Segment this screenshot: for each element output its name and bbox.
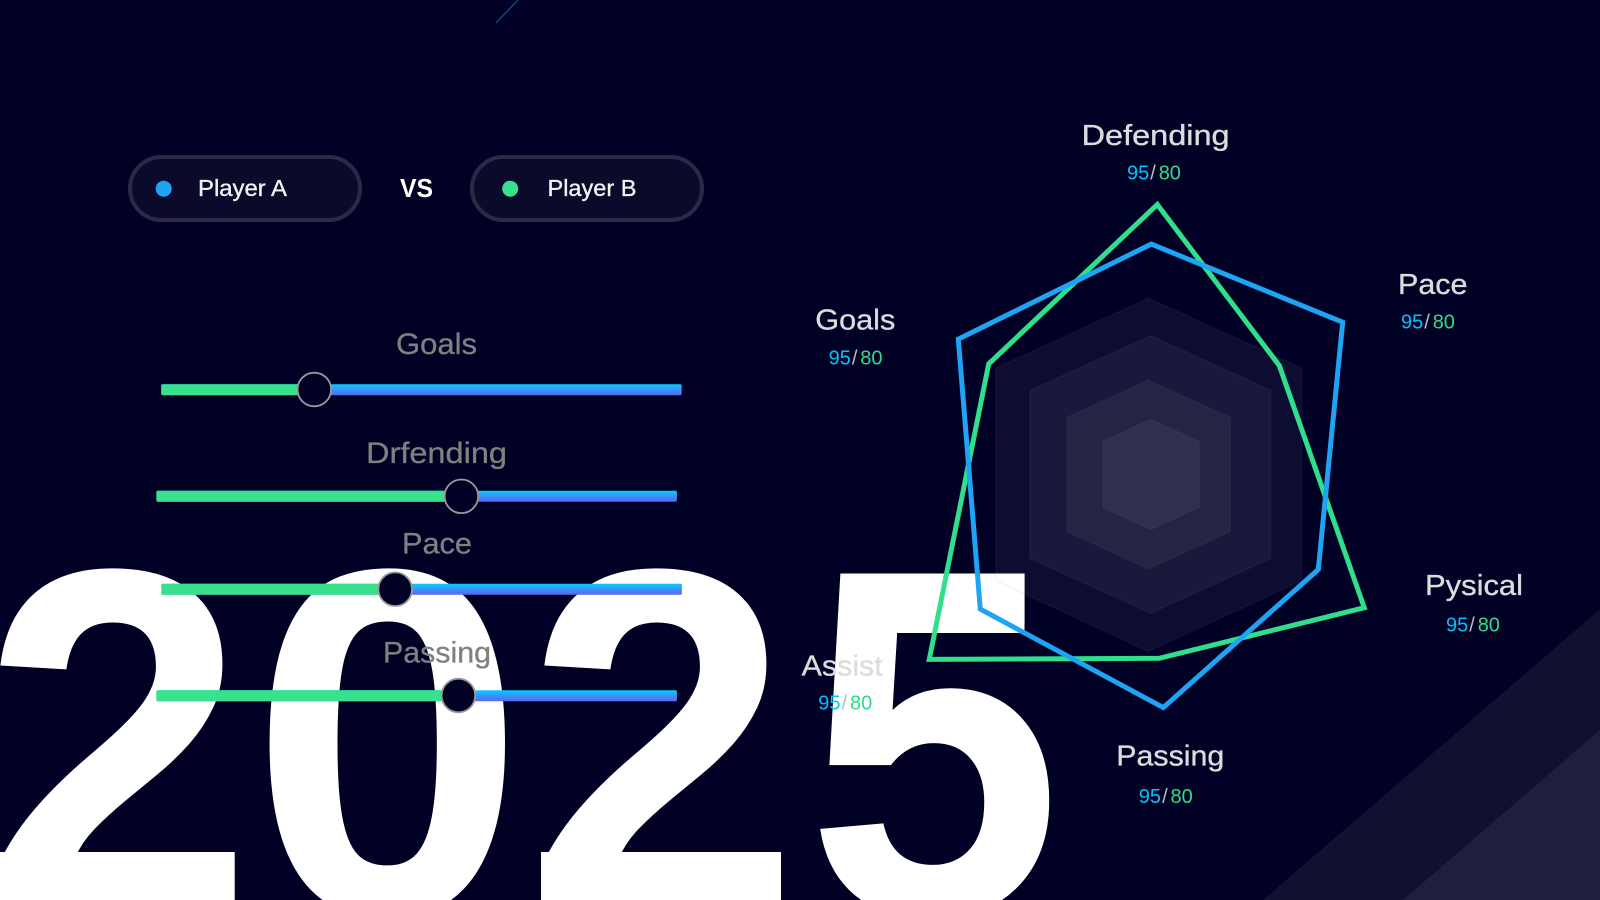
radar label: Pace: 80 xyxy=(1433,312,1455,334)
slider: Pace xyxy=(161,527,682,606)
radar label: Assist: / xyxy=(842,692,848,714)
radar label: Passing: Passing xyxy=(1116,740,1224,772)
radar label: Defending: / xyxy=(1150,163,1156,185)
radar label: Pysical xyxy=(1425,570,1523,637)
slider: Drfending xyxy=(156,437,677,513)
radar label: Assist: 95 xyxy=(818,692,841,714)
radar label: Pace: Pace xyxy=(1398,269,1468,301)
player A dot xyxy=(156,181,172,197)
radar label: Pysical: 95 xyxy=(1446,615,1468,637)
Pace label: Pace xyxy=(402,527,472,560)
radar label: Defending: 80 xyxy=(1159,163,1181,185)
background band: outer diagonal xyxy=(1263,609,1600,900)
radar label: Passing: 80 xyxy=(1170,786,1193,808)
radar label: Assist xyxy=(802,651,883,714)
radar label: Pysical: / xyxy=(1469,615,1475,637)
player A name: Player A xyxy=(198,175,288,201)
radar chart xyxy=(929,204,1364,708)
VS label: VS xyxy=(400,173,433,203)
radar label: Goals: 95 xyxy=(829,347,851,369)
radar label: Assist: 80 xyxy=(850,692,872,714)
accent line at top xyxy=(496,0,518,23)
legend: player B pill xyxy=(472,157,702,220)
radar label: Pace xyxy=(1398,269,1468,334)
legend: player A pill xyxy=(130,157,360,220)
Drfending label: Drfending xyxy=(366,437,507,470)
large year 2025 xyxy=(0,466,1062,900)
radar label: Pace: 95 xyxy=(1401,312,1423,334)
radar label: Goals: 80 xyxy=(860,347,883,369)
radar label: Pace: / xyxy=(1424,312,1430,334)
radar label: Defending: 95 xyxy=(1127,163,1149,185)
radar label: Defending: Defending xyxy=(1082,120,1230,152)
radar label: Passing: 95 xyxy=(1139,786,1161,808)
radar label: Goals: / xyxy=(852,347,858,369)
player B polygon xyxy=(929,204,1364,659)
radar label: Assist: Assist xyxy=(802,651,883,683)
background band: inner diagonal xyxy=(1403,730,1600,900)
player A polygon xyxy=(958,244,1343,708)
slider: Goals xyxy=(161,328,682,406)
radar label: Pysical: 80 xyxy=(1478,615,1500,637)
radar label: Goals: Goals xyxy=(815,305,895,337)
radar grid hexagons xyxy=(996,298,1302,651)
player B dot xyxy=(502,181,518,197)
radar label: Goals xyxy=(815,305,895,369)
Passing label: Passing xyxy=(383,636,491,669)
player B name: Player B xyxy=(548,175,636,201)
radar label: Passing xyxy=(1116,740,1224,808)
radar label: Defending xyxy=(1082,120,1230,185)
radar label: Passing: / xyxy=(1162,786,1168,808)
slider: Passing xyxy=(156,636,677,712)
radar label: Pysical: Pysical xyxy=(1425,570,1523,602)
Goals label: Goals xyxy=(396,328,477,361)
